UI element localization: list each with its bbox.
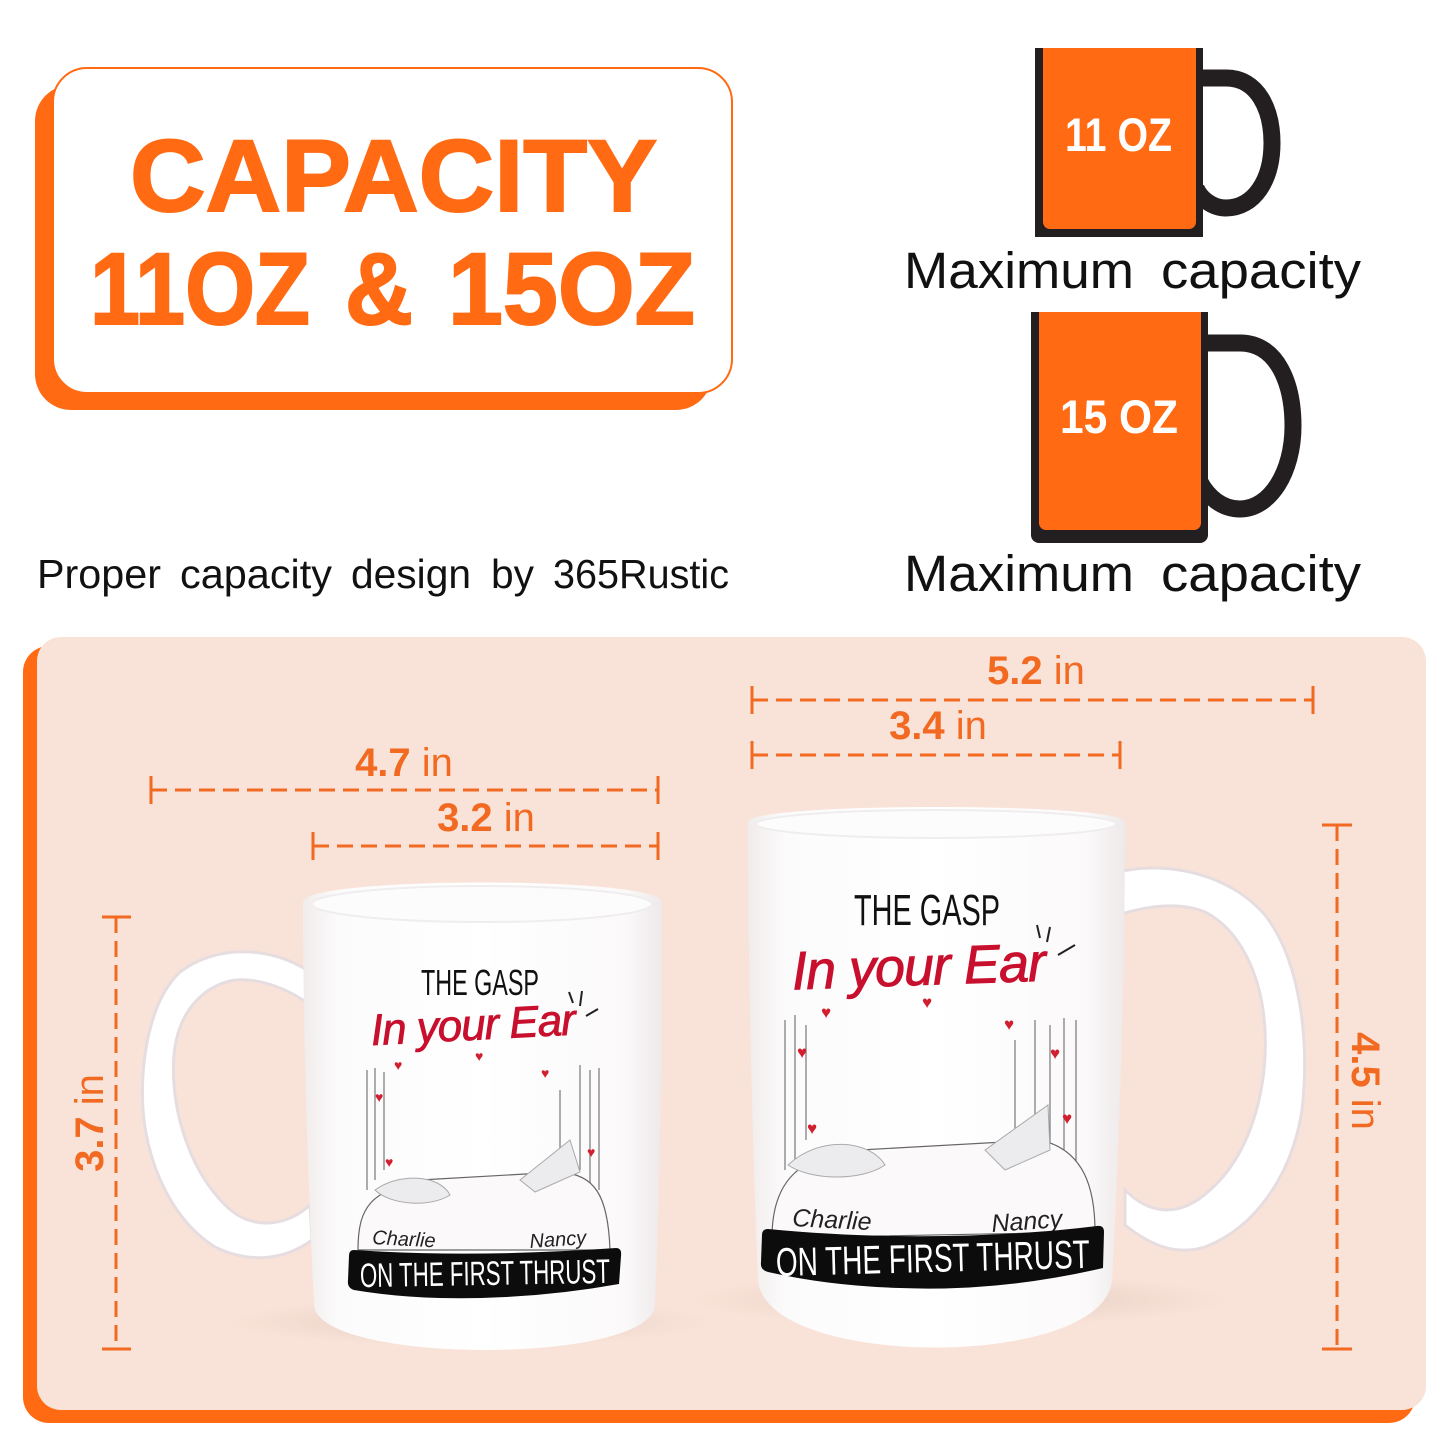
mug body — [303, 882, 662, 1350]
icon: 11 oz mug: 11 OZ — [1065, 108, 1172, 161]
banner text: ON THE FIRST THRUST — [775, 1233, 1090, 1285]
mug artwork script: In your Ear — [791, 933, 1049, 1001]
caption: proper capacity: Proper — [37, 551, 161, 597]
mug handle — [1118, 868, 1305, 1250]
title: sizes — [90, 232, 695, 346]
mug: 15 oz — [690, 807, 1305, 1348]
hearts: ♥ — [1004, 1015, 1014, 1034]
icon: 11 oz mug — [1035, 48, 1272, 237]
hearts — [797, 993, 1072, 1138]
hearts — [375, 1048, 595, 1170]
names: Charlie — [372, 1227, 436, 1252]
bed — [772, 1140, 1095, 1238]
bed — [358, 1172, 610, 1250]
dimension: 15 oz height: 4.5 in — [1343, 1032, 1387, 1130]
mug: 11 oz — [142, 882, 710, 1350]
hearts: ♥ — [1062, 1109, 1072, 1128]
caption: proper capacity: capacity — [180, 551, 332, 597]
label: 11 oz maximum capacity: capacity — [1161, 242, 1362, 299]
caption: proper capacity — [37, 551, 729, 597]
dimension: 11 oz height: 3.7 in — [68, 1074, 112, 1172]
pillows — [375, 1140, 580, 1203]
title: sizes: 11OZ — [90, 232, 310, 346]
dimension: 15 oz handle width: 5.2 in — [987, 649, 1085, 693]
mug handle — [142, 952, 312, 1258]
mug artwork script: In your Ear — [370, 995, 579, 1055]
dimension: 15 oz handle width — [752, 649, 1313, 714]
label: 11 oz maximum capacity: Maximum — [904, 242, 1134, 299]
curtains — [367, 1065, 599, 1195]
title: sizes: 15OZ — [448, 232, 695, 346]
hearts: ♥ — [385, 1154, 393, 1170]
caption: proper capacity: design — [351, 551, 471, 597]
dimension: 11 oz handle width: 4.7 in — [355, 741, 453, 785]
panel: mug dimensions — [23, 637, 1426, 1423]
hearts: ♥ — [807, 1119, 817, 1138]
hearts: ♥ — [541, 1065, 549, 1081]
banner: ON THE FIRST THRUST — [360, 1253, 610, 1295]
icon: 15 oz mug — [1031, 312, 1293, 543]
names: Charlie — [792, 1204, 872, 1236]
banner — [348, 1248, 621, 1298]
hearts: ♥ — [587, 1144, 595, 1160]
dimension: 11 oz handle width — [151, 741, 658, 804]
label: 15 oz maximum capacity: Maximum — [904, 545, 1134, 602]
mug artwork heading: THE GASP — [854, 886, 1000, 935]
label: 15 oz maximum capacity: capacity — [1161, 545, 1362, 602]
label: 11 oz maximum capacity — [904, 242, 1362, 299]
hearts: ♥ — [1050, 1044, 1060, 1063]
title: sizes: & — [345, 232, 413, 346]
title: capacity: CAPACITY — [130, 119, 657, 233]
caption: proper capacity: 365Rustic — [553, 551, 729, 597]
mug rim — [312, 886, 652, 922]
hearts: ♥ — [475, 1048, 483, 1064]
dimension: 11 oz body width: 3.2 in — [437, 796, 535, 840]
mug artwork heading: THE GASP — [421, 962, 539, 1003]
panel: capacity heading — [35, 68, 732, 410]
hearts: ♥ — [922, 993, 932, 1012]
banner — [761, 1226, 1104, 1289]
hearts: ♥ — [797, 1043, 807, 1062]
dimension: 11 oz height — [68, 917, 131, 1349]
curtains — [785, 1015, 1076, 1180]
hearts: ♥ — [394, 1057, 402, 1073]
mug: 11 oz: Nancy — [529, 1227, 588, 1253]
icon: 15 oz mug: 15 OZ — [1060, 390, 1178, 443]
label: 15 oz maximum capacity — [904, 545, 1362, 602]
accent strokes — [1037, 925, 1075, 955]
pillows — [788, 1105, 1050, 1177]
mug rim — [756, 810, 1116, 838]
dimension: 11 oz body width — [313, 796, 658, 860]
mug: 15 oz: Nancy — [990, 1205, 1065, 1238]
caption: proper capacity: by — [491, 551, 534, 597]
mug body — [748, 807, 1125, 1348]
dimension: 15 oz body width: 3.4 in — [889, 704, 987, 748]
accent strokes — [569, 991, 598, 1016]
dimension: 15 oz body width — [752, 704, 1120, 769]
hearts: ♥ — [375, 1089, 383, 1105]
hearts: ♥ — [821, 1003, 831, 1022]
dimension: 15 oz height — [1322, 825, 1387, 1349]
